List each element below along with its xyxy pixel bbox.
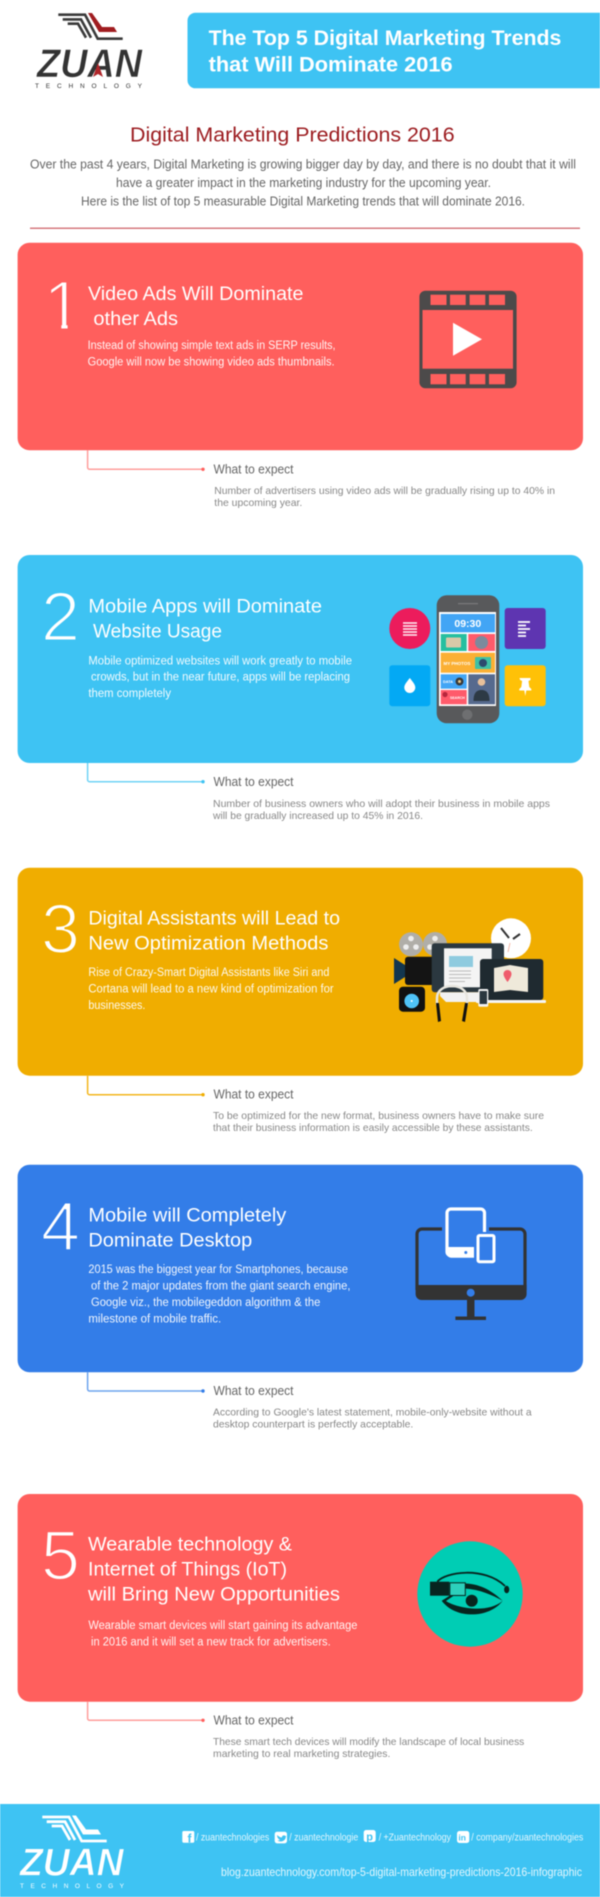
what to expect 2: will be gradually increased up to 45% in 2016. [212,810,423,822]
trend 4 heading: Mobile will Completely [88,1206,287,1227]
what to expect 4: According to Google's latest statement, mobile-only-website without a [213,1407,532,1419]
trend 2 body: Mobile optimized websites will work greatly to mobile [88,655,352,667]
trend 4 heading [88,1206,287,1251]
what to expect 4 [213,1384,532,1431]
footer logo [19,1816,125,1890]
icon: facebook: f [188,1832,192,1846]
panel: trend 1 video ads [18,243,583,450]
what to expect 3: that their business information is easily accessible by these assistants. [213,1122,533,1134]
trend 5 heading: Wearable technology & [88,1535,292,1556]
icon: desktop with tablet and phone [416,1209,527,1320]
trend 5 heading: will Bring New Opportunities [87,1584,340,1605]
trend 5 body: in 2016 and it will set a new track for advertisers. [91,1637,331,1649]
icon: smartphone with app tiles: MY PHOTOS [444,661,470,666]
social links: / +Zuantechnology [379,1833,451,1844]
social links: / company/zuantechnologies [471,1833,583,1844]
header banner: The Top 5 Digital Marketing Trends [209,27,561,50]
what to expect 5 [213,1714,524,1760]
icon: twitter [275,1832,287,1843]
trend 2 heading: Website Usage [93,621,222,642]
what to expect 3 [213,1088,544,1134]
what to expect 1: Number of advertisers using video ads will be gradually rising up to 40% in [214,485,555,497]
trend 3 body [88,967,334,1012]
panel: trend 3 digital assistants [18,868,583,1076]
what to expect 1: What to expect [214,462,294,476]
what to expect 2: What to expect [214,775,294,789]
icon: smart glass eye [417,1541,523,1647]
footer [0,1804,600,1897]
icon: media devices collage [394,918,546,1022]
trend 2 body: crowds, but in the near future, apps will be replacing [91,672,350,684]
trend 3 heading: Digital Assistants will Lead to [88,908,340,929]
header banner: that Will Dominate 2016 [209,54,453,77]
trend 1 body: Google will now be showing video ads thumbnails. [88,356,335,368]
trend 4 body: milestone of mobile traffic. [88,1313,221,1325]
what to expect 3: What to expect [214,1088,294,1102]
social links: / zuantechnologie [289,1833,359,1844]
trend 3 body: Rise of Crazy-Smart Digital Assistants like Siri and [88,967,329,979]
trend 1 heading [88,284,304,330]
social links: / zuantechnologies [196,1833,269,1844]
trend 2 body [88,655,352,700]
logo: Zuan Technology: TECHNOLOGY [35,83,143,90]
logo: Zuan Technology [35,13,143,90]
icon: facebook [182,1831,194,1846]
number 5: 5 [41,1516,80,1594]
icon: smartphone with app tiles: 09:30 [454,618,481,630]
trend 1 heading: Video Ads Will Dominate [88,284,304,305]
what to expect 5: What to expect [214,1714,294,1728]
panel: trend 4 mobile vs desktop [18,1165,583,1372]
what to expect 1 [214,462,555,509]
trend 4 body [88,1264,351,1325]
intro text [30,157,576,209]
icon: linkedin [457,1831,469,1843]
number 4: 4 [41,1188,80,1266]
trend 3 heading [88,908,340,954]
icon: smartphone with app tiles: DATA [443,680,453,684]
icon: smartphone with app tiles: SEARCH [450,696,465,700]
trend 3 heading: New Optimization Methods [88,933,328,954]
connector 4 [88,1372,205,1393]
connector 2 [88,763,205,783]
logo: Zuan Technology: ZUAN [36,42,143,86]
trend 4 body: 2015 was the biggest year for Smartphones, because [88,1264,348,1276]
trend 4 body: of the 2 major updates from the giant search engine, [91,1280,350,1292]
trend 3 body: Cortana will lead to a new kind of optimization for [88,984,334,996]
trend 5 body: Wearable smart devices will start gaining its advantage [88,1620,357,1632]
trend 1 body [88,340,336,368]
trend 4 body: Google viz., the mobilegeddon algorithm & the [91,1297,320,1309]
icon: film strip with play [419,291,517,388]
footer logo: ZUAN [19,1842,124,1884]
connector 1 [88,450,205,471]
what to expect 4: desktop counterpart is perfectly acceptable. [213,1419,413,1431]
trend 2 heading: Mobile Apps will Dominate [88,597,322,618]
trend 2 body: them completely [88,688,171,700]
trend 3 body: businesses. [88,1000,145,1012]
icon: pinterest [364,1830,376,1844]
trend 2 heading [88,597,322,642]
connector 5 [88,1702,205,1722]
what to expect 2 [212,775,550,822]
number 1: 1 [44,266,82,344]
trend 5 heading: Internet of Things (IoT) [88,1560,287,1581]
intro text: have a greater impact in the marketing industry for the upcoming year. [116,176,491,190]
footer logo: TECHNOLOGY [20,1883,125,1890]
icon: pinterest: p [366,1832,373,1844]
what to expect 5: marketing to real marketing strategies. [213,1748,390,1760]
trend 4 heading: Dominate Desktop [88,1230,252,1251]
trend 5 heading [87,1535,340,1605]
header banner [188,13,600,88]
connector 3 [88,1076,205,1096]
number 3: 3 [41,890,80,968]
icon: smartphone with app tiles [389,595,546,723]
trend 1 heading: other Ads [93,309,178,330]
number 2: 2 [41,578,80,656]
trend 1 body: Instead of showing simple text ads in SERP results, [88,340,336,352]
what to expect 4: What to expect [214,1384,294,1398]
what to expect 2: Number of business owners who will adopt their business in mobile apps [213,798,550,810]
what to expect 5: These smart tech devices will modify the landscape of local business [213,1736,524,1748]
icon: linkedin: in [458,1833,466,1843]
panel: trend 5 wearables [18,1494,583,1702]
what to expect 3: To be optimized for the new format, business owners have to make sure [213,1110,544,1122]
panel: trend 2 mobile apps [18,555,583,763]
social links [182,1830,583,1846]
intro text: Here is the list of top 5 measurable Digital Marketing trends that will dominate 2016. [81,195,525,209]
intro text: Over the past 4 years, Digital Marketing is growing bigger day by day, and there is no doubt that it will [30,157,576,171]
trend 5 body [88,1620,357,1649]
heading: predictions: Digital Marketing Predictions 2016 [130,124,455,147]
what to expect 1: the upcoming year. [214,497,302,509]
